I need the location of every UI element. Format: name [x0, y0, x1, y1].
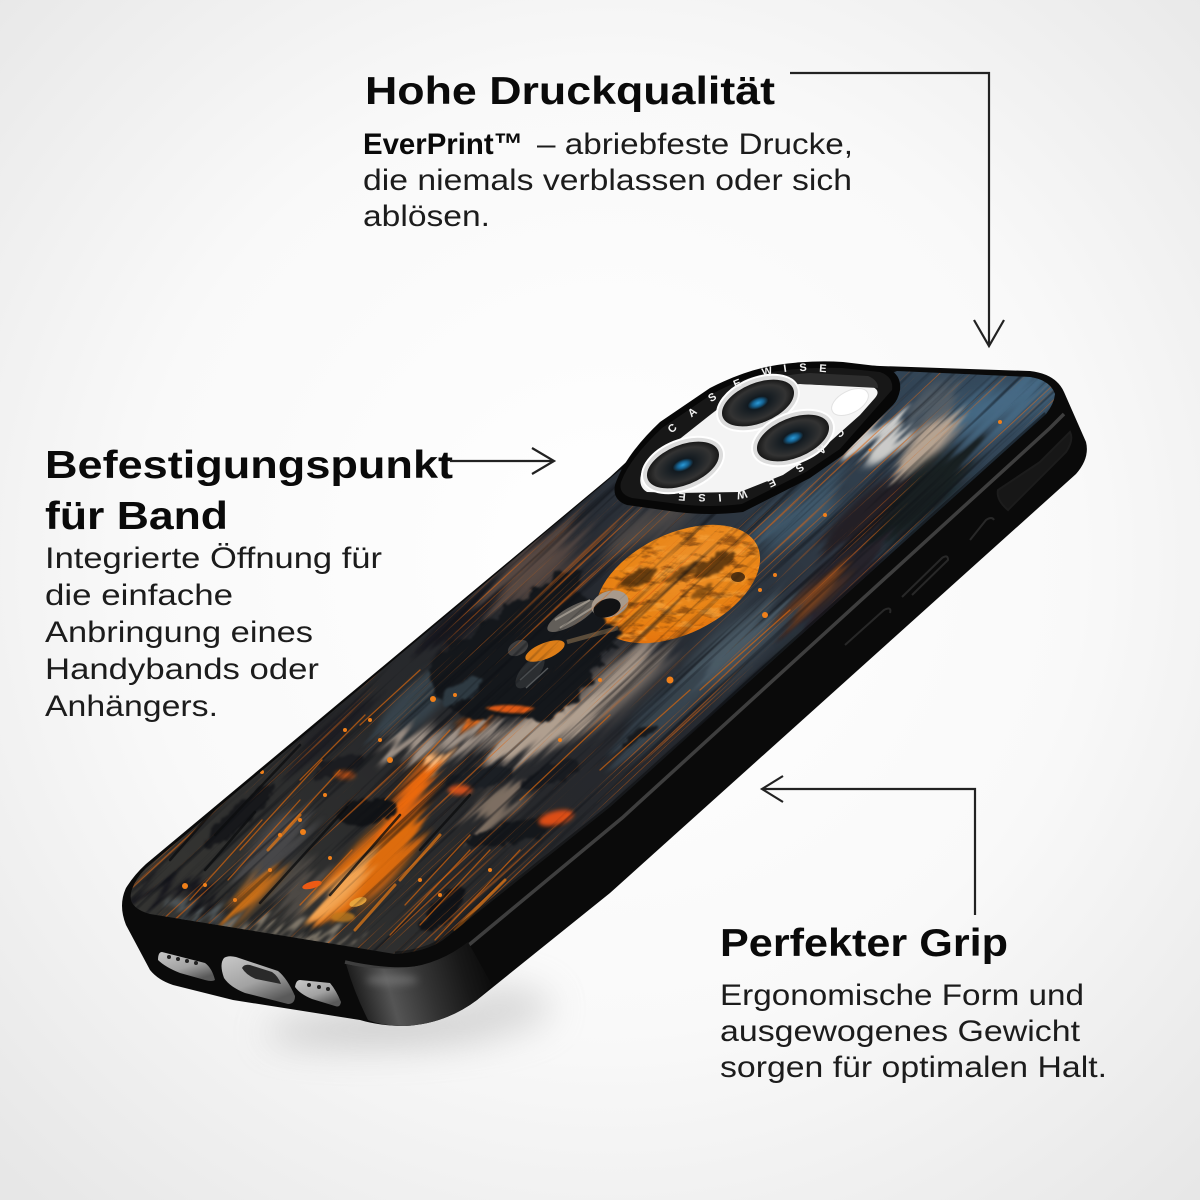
description: ablösen.: [363, 200, 490, 233]
left speaker grille: [158, 952, 215, 981]
heading: Befestigungspunkt: [45, 444, 453, 487]
description: ausgewogenes Gewicht: [720, 1015, 1081, 1048]
opening inner wall: [760, 373, 878, 388]
heading: [45, 444, 453, 538]
bumper branding: C: [666, 422, 680, 436]
callout: Hohe Druckqualität: [363, 70, 853, 233]
highlight on corner: [366, 975, 418, 985]
dragged paint layer: [131, 374, 1055, 947]
bevel highlight: [345, 414, 1064, 969]
camera island: [614, 361, 900, 514]
bumper branding: A: [815, 442, 828, 456]
arrow: band attachment: [450, 448, 554, 474]
bumper branding: E: [678, 490, 686, 502]
arrow: print quality: [790, 73, 1004, 346]
wrist band slot: [998, 432, 1071, 510]
description: sorgen für optimalen Halt.: [720, 1051, 1107, 1084]
bumper branding: S: [706, 391, 719, 405]
sky and clouds: [284, 374, 1055, 778]
camera opening: [640, 384, 878, 493]
volume up button: [902, 556, 948, 597]
dark rocks: [199, 721, 660, 940]
bumper branding: W: [735, 487, 748, 501]
lens left: [634, 426, 732, 504]
bumper branding: E: [766, 475, 777, 489]
description: die niemals verblassen oder sich: [363, 164, 852, 197]
moon: [598, 524, 760, 644]
callout: Perfekter Grip: [720, 922, 1107, 1084]
treeline: [427, 570, 623, 722]
pale foreground: [131, 872, 368, 947]
ember rock highlights: [301, 771, 575, 922]
lower painted streaks: [170, 610, 790, 940]
description: [45, 542, 382, 723]
bumper branding: I: [718, 491, 722, 503]
description: EverPrint™: [363, 128, 523, 161]
fire glow: [217, 714, 501, 932]
description: Handybands oder: [45, 653, 319, 686]
printed artwork: [130, 371, 1055, 954]
phone case: [122, 361, 1087, 1026]
heading: Hohe Druckqualität: [365, 70, 775, 113]
astronaut: [485, 586, 632, 713]
description: die einfache: [45, 579, 233, 612]
embers: [182, 373, 1002, 902]
camera bumper: [614, 361, 900, 514]
description: [720, 979, 1107, 1084]
bumper branding: W: [761, 365, 774, 379]
bumper branding: E: [732, 377, 743, 391]
bumper branding: S: [793, 460, 806, 474]
description: Anhängers.: [45, 690, 218, 723]
description: Anbringung eines: [45, 616, 313, 649]
volume down button: [845, 609, 890, 645]
bumper branding: S: [799, 362, 807, 374]
glass edge shading: [395, 414, 1046, 954]
glossy bottom corner: [346, 942, 492, 1026]
bumper branding: C: [832, 425, 846, 439]
description: [363, 128, 853, 233]
side buttons: [845, 432, 1071, 645]
lens right: [744, 399, 842, 477]
arrow: grip: [762, 776, 975, 915]
bumper top face: [620, 368, 892, 506]
mute switch: [970, 518, 994, 540]
phone drop shadow: [264, 986, 551, 1051]
USB-C port: [222, 956, 295, 1004]
case body: [122, 365, 1087, 1026]
bumper branding: [666, 362, 846, 503]
description: – abriebfeste Drucke,: [537, 128, 853, 161]
bumper branding: I: [783, 363, 787, 375]
description: Ergonomische Form und: [720, 979, 1084, 1012]
charging port and speakers: [158, 952, 341, 1006]
description: Integrierte Öffnung für: [45, 542, 382, 575]
callout: Befestigungspunkt für Band: [45, 444, 453, 723]
bumper branding: S: [698, 491, 706, 503]
flash: [827, 383, 873, 421]
heading: Perfekter Grip: [720, 922, 1008, 965]
streak textures: [136, 372, 1054, 954]
heading: für Band: [45, 495, 228, 538]
bumper branding: A: [686, 406, 699, 420]
smoke cloud: [364, 636, 710, 846]
right speaker grille: [295, 980, 341, 1006]
bumper branding: E: [819, 363, 827, 375]
lens top: [709, 364, 807, 442]
